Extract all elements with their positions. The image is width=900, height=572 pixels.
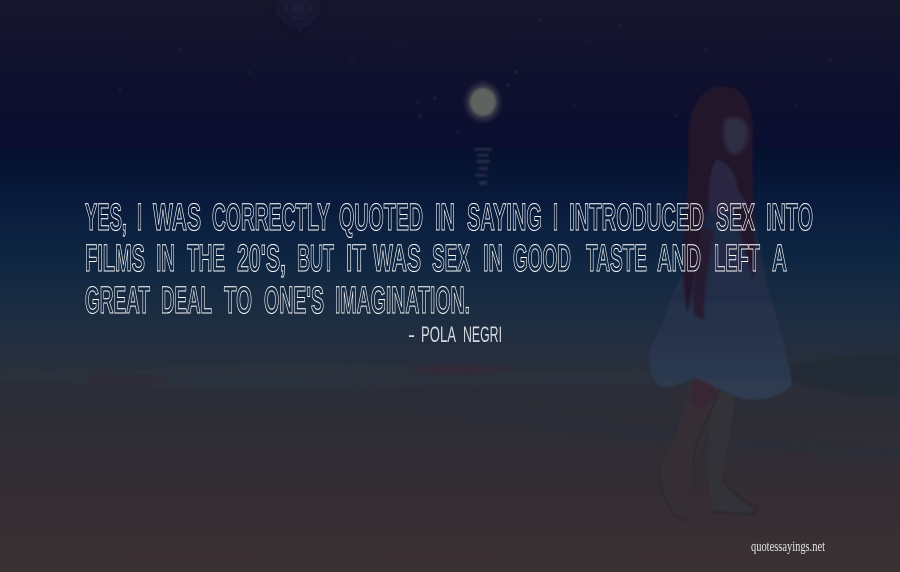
quote line 2: LEFT	[714, 238, 760, 280]
quote line 3: IMAGINATION.	[335, 280, 470, 322]
quote line 2: IN	[483, 238, 503, 280]
attribution: -	[408, 322, 415, 347]
attribution: NEGRI	[463, 322, 502, 347]
dress	[649, 195, 792, 399]
quote line 1: I	[553, 197, 558, 239]
quote line 1: CORRECTLY	[212, 197, 330, 239]
quote line 2: FILMS	[85, 238, 145, 280]
face	[723, 117, 748, 154]
site watermark: quotessayings.net	[751, 539, 826, 555]
attribution: POLA	[421, 322, 456, 347]
quote line 2	[85, 238, 787, 280]
wave foam bands	[0, 352, 900, 458]
quote line 2: THE	[187, 238, 225, 280]
quote line 1	[85, 197, 813, 239]
beach sand	[0, 368, 900, 572]
back and shoulder	[709, 160, 748, 213]
quote line 2: TASTE	[586, 238, 647, 280]
faint glow at top of the sky	[282, 0, 314, 22]
quote line 1: SAYING	[467, 197, 542, 239]
quote line 2: IT	[346, 238, 366, 280]
attribution	[408, 322, 502, 347]
quote line 2: A	[772, 238, 787, 280]
quote line 2: WAS	[373, 238, 421, 280]
moon reflection	[474, 148, 492, 185]
arm	[693, 225, 714, 320]
quote line 2: BUT	[297, 238, 334, 280]
stars	[119, 19, 831, 133]
quote line 1: SEX	[716, 197, 755, 239]
quote line 2: GOOD	[513, 238, 571, 280]
legs	[659, 375, 757, 520]
quote line 3: TO	[224, 280, 252, 322]
quote line 3: GREAT	[85, 280, 150, 322]
sea	[0, 147, 900, 372]
quote line 2: IN	[156, 238, 175, 280]
quote line 2: AND	[657, 238, 701, 280]
quote line 1: INTRODUCED	[569, 197, 704, 239]
quote line 1: YES,	[85, 197, 127, 239]
quote line 3: ONE'S	[264, 280, 324, 322]
quote line 3	[85, 280, 470, 322]
quote line 1: INTO	[766, 197, 813, 239]
hair	[683, 86, 755, 312]
moon	[466, 83, 500, 121]
quote line 3: DEAL	[161, 280, 212, 322]
quote line 1: WAS	[153, 197, 201, 239]
quote line 2: SEX	[432, 238, 470, 280]
quote line 2: 20'S,	[237, 238, 286, 280]
quote line 1: QUOTED	[339, 197, 423, 239]
quote line 1: IN	[435, 197, 455, 239]
quote text	[85, 197, 813, 322]
quote line 1: I	[137, 197, 142, 239]
sky	[0, 0, 900, 148]
girl figure	[649, 86, 792, 520]
